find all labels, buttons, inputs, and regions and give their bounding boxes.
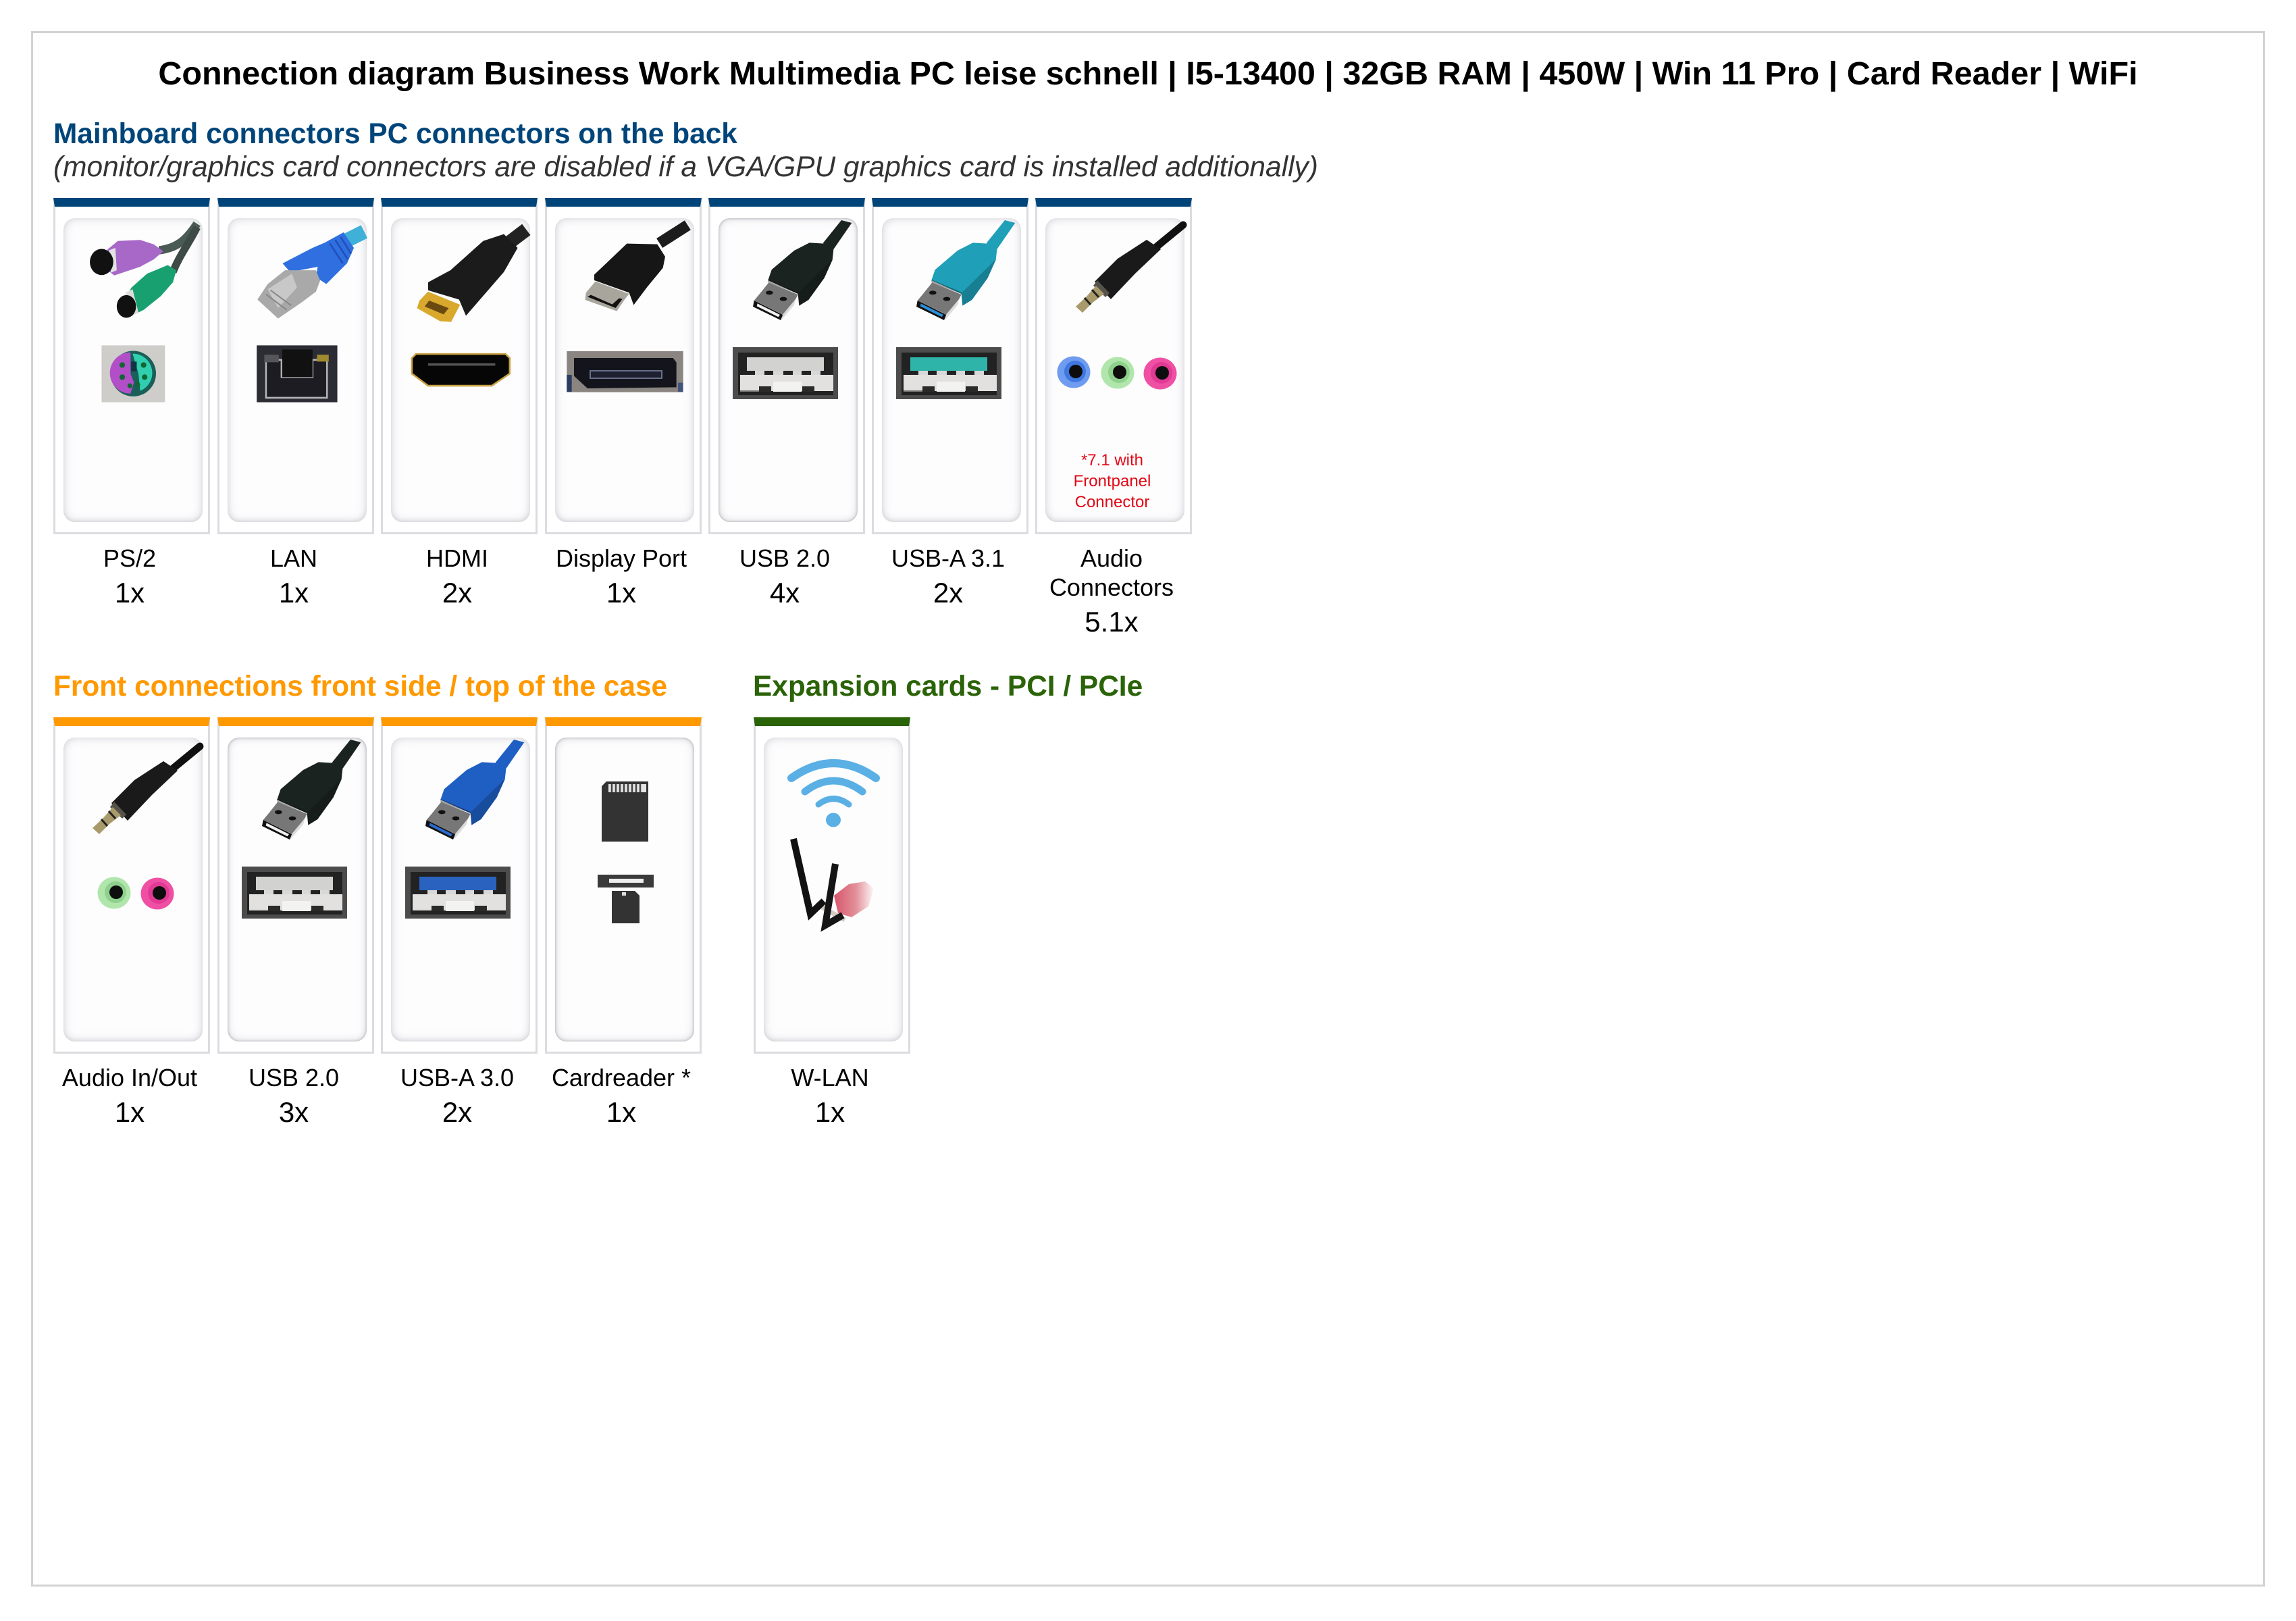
- image panel: [1045, 218, 1184, 522]
- card frame: [381, 198, 538, 534]
- panel: front connections: [53, 672, 749, 1131]
- card frame: [217, 717, 374, 1054]
- card frame: [381, 717, 538, 1054]
- note: 7.1 with frontpanel connector: Frontpanel: [1074, 472, 1151, 490]
- heading: mainboard connectors: Mainboard connectors PC connectors on the back: [53, 118, 737, 149]
- heading: front connections: Front connections front side / top of the case: [53, 670, 667, 702]
- image panel: [719, 218, 858, 522]
- icon: USB plug and port: [217, 717, 374, 1054]
- card frame: [53, 717, 210, 1054]
- label: PS/2: [103, 544, 156, 571]
- card frame: [1035, 198, 1192, 534]
- card top bar: [217, 717, 374, 726]
- heading: expansion cards: Expansion cards - PCI / PCIe: [753, 670, 1143, 702]
- card frame: [872, 198, 1028, 534]
- card: USB-A 3.1: [872, 198, 1028, 608]
- icon: audio jack and three sockets: [1058, 222, 1187, 389]
- count: 2x: [933, 577, 963, 608]
- card: USB 2.0: [708, 198, 865, 608]
- image panel: [555, 738, 694, 1041]
- image panel: [391, 218, 530, 522]
- count: 1x: [115, 1096, 145, 1128]
- count: 1x: [606, 1096, 636, 1128]
- card top bar: [708, 198, 865, 207]
- image panel: [764, 738, 903, 1041]
- card top bar: [872, 198, 1028, 207]
- label: Connectors: [1049, 573, 1174, 601]
- image panel: [228, 738, 367, 1041]
- card top bar: [53, 198, 210, 207]
- card top bar: [381, 198, 538, 207]
- label: Audio In/Out: [62, 1063, 197, 1091]
- card frame: [545, 198, 702, 534]
- card frame: [754, 717, 910, 1054]
- label: Display Port: [556, 544, 687, 571]
- card: HDMI: [381, 198, 538, 608]
- icon: LAN plug and port: [257, 225, 367, 403]
- card: W-LAN: [754, 717, 910, 1163]
- image panel: [228, 218, 367, 522]
- label: LAN: [270, 544, 317, 571]
- card top bar: [217, 198, 374, 207]
- note: 7.1 with frontpanel connector: [1074, 451, 1151, 511]
- card: Audio In/Out: [53, 717, 210, 1163]
- image panel: [391, 738, 530, 1041]
- icon: HDMI plug and port: [411, 224, 531, 386]
- note: 7.1 with frontpanel connector: Connector: [1075, 493, 1149, 511]
- note: 7.1 with frontpanel connector: *7.1 with: [1081, 451, 1143, 469]
- card frame: [545, 717, 702, 1054]
- card top bar: [381, 717, 538, 726]
- count: 3x: [279, 1096, 309, 1128]
- icon: USB plug and port: [733, 220, 852, 399]
- card: Cardreader: [545, 717, 702, 1163]
- card frame: [708, 198, 865, 534]
- image panel: [63, 738, 203, 1041]
- image panel: [555, 218, 694, 522]
- label: [1035, 544, 1188, 602]
- card: front USB 2.0: [217, 717, 374, 1163]
- count: 1x: [606, 577, 636, 608]
- label: USB-A 3.1: [891, 544, 1005, 571]
- count: 4x: [770, 577, 800, 608]
- card frame: [217, 198, 374, 534]
- icon: DisplayPort plug and port: [567, 220, 691, 392]
- count: 1x: [279, 577, 309, 608]
- label: HDMI: [426, 544, 488, 571]
- card top bar: [53, 717, 210, 726]
- title: Connection diagram Business Work Multimedia PC leise schnell | I5-13400 | 32GB RAM | 450W | Win 11 Pro | Card Reader | WiFi: [158, 55, 2138, 92]
- icon: audio jack and two sockets: [53, 717, 210, 1054]
- note: graphics card connectors: (monitor/graphics card connectors are disabled if a VGA/GPU graphics card is installed additionally): [53, 151, 1318, 182]
- card: LAN: [217, 198, 374, 608]
- label: W-LAN: [791, 1063, 869, 1091]
- icon: wifi signal and antenna card: [754, 717, 910, 1054]
- card frame: [53, 198, 210, 534]
- image panel: [63, 218, 203, 522]
- card top bar: [545, 198, 702, 207]
- card top bar: [545, 717, 702, 726]
- card: Audio connectors: [1035, 198, 1192, 638]
- card: Display Port: [545, 198, 702, 608]
- panel: mainboard connectors: [53, 118, 1318, 638]
- label: USB 2.0: [739, 544, 830, 571]
- icon: USB-A 3.1 plug and port: [896, 220, 1016, 399]
- card top bar: [754, 717, 910, 726]
- label: USB-A 3.0: [400, 1063, 514, 1091]
- card: PS/2: [53, 198, 210, 608]
- card top bar: [1035, 198, 1192, 207]
- count: 1x: [815, 1096, 845, 1128]
- panel: expansion cards: [754, 672, 1159, 1131]
- icon: PS/2 plugs and port: [90, 222, 201, 403]
- label: Audio: [1080, 544, 1143, 572]
- count: 2x: [442, 577, 472, 608]
- count: 5.1x: [1085, 605, 1139, 638]
- card: USB-A 3.0: [381, 717, 538, 1163]
- label: USB 2.0: [249, 1063, 339, 1091]
- image panel: [882, 218, 1021, 522]
- count: 2x: [442, 1096, 472, 1128]
- label: Cardreader *: [552, 1063, 691, 1091]
- icon: memory card and reader slot: [545, 717, 702, 1054]
- count: 1x: [115, 577, 145, 608]
- icon: USB-A 3.0 plug and port: [381, 717, 538, 1054]
